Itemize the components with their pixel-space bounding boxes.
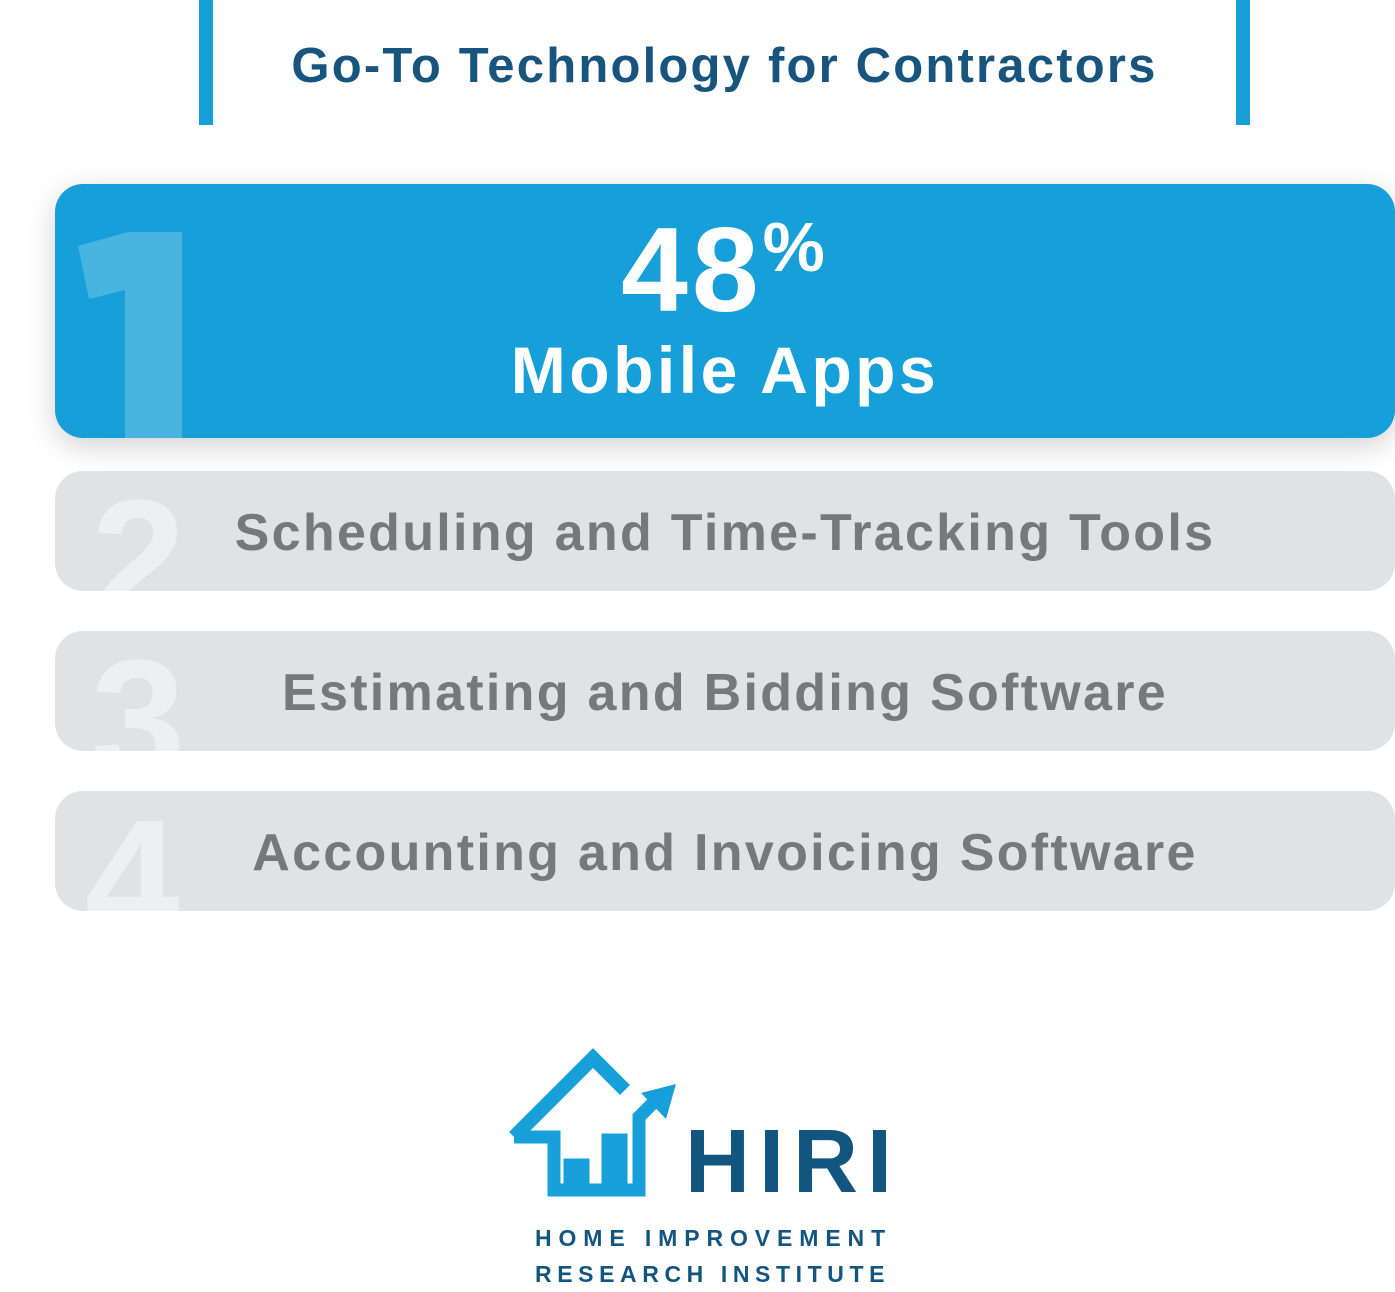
icon: house with arrow: [509, 1048, 676, 1196]
card 1: mobile apps: [55, 184, 1395, 438]
label: Scheduling and Time-Tracking Tools: [235, 504, 1215, 562]
label: Accounting and Invoicing Software: [252, 824, 1198, 882]
HIRI wordmark: HIRI: [685, 1112, 901, 1212]
subtitle: RESEARCH INSTITUTE: [535, 1261, 890, 1287]
subtitle: HOME IMPROVEMENT: [535, 1225, 892, 1251]
logo: [509, 1048, 901, 1287]
subtitle: [535, 1225, 892, 1287]
label mobile apps: Mobile Apps: [511, 333, 939, 407]
card 4: [55, 791, 1395, 911]
card 2: [55, 471, 1395, 591]
title bar left: [199, 0, 213, 125]
rank number 1: [78, 232, 182, 438]
title bar right: [1236, 0, 1250, 125]
label: Estimating and Bidding Software: [282, 664, 1168, 722]
title: Go-To Technology for Contractors: [291, 39, 1158, 93]
card 3: [55, 631, 1395, 751]
stat 48%: 48%: [621, 203, 829, 337]
